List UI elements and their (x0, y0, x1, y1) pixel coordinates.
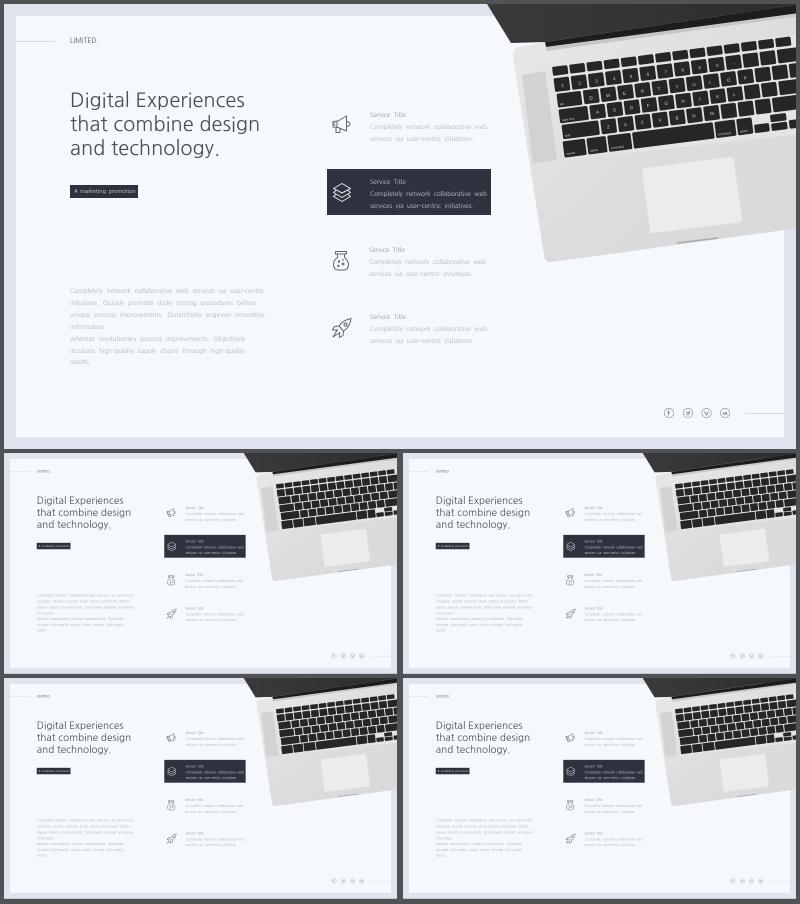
service 2: Completely network collaborative web (186, 771, 244, 774)
laptop photo: option (590, 148, 599, 153)
icon: flask (166, 800, 177, 811)
service 2: services via user-centric initiatives. (585, 777, 636, 780)
highlighted service box (563, 535, 645, 558)
social icons (730, 653, 764, 658)
brand label: LIMITED. (436, 470, 450, 473)
title (37, 721, 131, 754)
title (70, 90, 260, 158)
body text: initiatives. Quickly promote sticky testing procedures before (70, 300, 256, 306)
tag: # marketing promotion (438, 769, 468, 772)
service 3: Completely network collaborative web (185, 579, 243, 582)
service 3: Completely network collaborative web (369, 258, 486, 264)
service 3: services via user-centric initiatives. (185, 585, 236, 588)
service 4: services via user-centric initiatives. (186, 619, 237, 622)
body text: whereas revolutionary process improvements. Objectively (37, 618, 124, 621)
brand label: LIMITED. (70, 38, 99, 45)
body text: initiatives. Quickly promote sticky testing procedures before (37, 600, 129, 603)
service 3: services via user-centric initiatives. (185, 810, 236, 813)
service 2: services via user-centric initiatives. (186, 777, 237, 780)
body text: Completely network collaborative web services via user-centric (37, 594, 133, 597)
title: and technology. (436, 519, 510, 529)
service 4: services via user-centric initiatives. (585, 844, 636, 847)
laptop photo: ASDFGHJKL (596, 92, 736, 115)
tag: # marketing promotion (74, 188, 136, 194)
body text: information (436, 837, 453, 840)
service 2 (584, 540, 643, 555)
tag: # marketing promotion (39, 769, 69, 772)
body text: unique process improvements. Distinctively engineer innovative (436, 606, 532, 609)
social icons (664, 408, 730, 418)
title: and technology. (37, 744, 111, 754)
body text: incubate high-quality supply chains through high-quality (37, 623, 123, 626)
service 1 (186, 506, 244, 522)
service 2 (186, 763, 244, 781)
service 3: Service Title (185, 798, 203, 801)
icon: megaphone (166, 508, 176, 517)
service 1: Completely network collaborative web (186, 738, 244, 741)
service 2 (585, 763, 643, 781)
service 4: Service Title (585, 832, 602, 835)
service 4: services via user-centric initiatives. (585, 619, 636, 622)
social icons (331, 653, 364, 658)
service 3 (584, 797, 642, 815)
title: Digital Experiences (37, 721, 123, 731)
service 1: services via user-centric initiatives. (585, 743, 636, 746)
icon: layers (333, 183, 351, 202)
service 2: Service Title (585, 540, 602, 543)
service 3 (369, 246, 486, 276)
body text: information (37, 837, 54, 840)
service 4: Completely network collaborative web (585, 838, 643, 841)
highlighted service box (164, 535, 246, 558)
highlighted service box (164, 760, 246, 783)
body text: information (37, 612, 54, 615)
body text (436, 594, 532, 632)
icon: flask (565, 800, 576, 811)
service 3: Service Title (185, 573, 203, 576)
body text: initiatives. Quickly promote sticky testing procedures before (436, 825, 528, 828)
service 3: Completely network collaborative web (185, 804, 243, 807)
icon: megaphone (566, 508, 575, 517)
service 2: services via user-centric initiatives. (186, 552, 237, 555)
laptop photo (244, 678, 397, 806)
title: that combine design (37, 508, 131, 518)
laptop photo: 1234567890- (561, 61, 735, 88)
service 4 (584, 606, 643, 622)
service 4 (186, 606, 244, 622)
brand label: LIMITED. (37, 470, 51, 473)
service 1: Completely network collaborative web (585, 738, 643, 741)
body text: whereas revolutionary process improvements. Objectively (436, 843, 523, 846)
body text: Completely network collaborative web services via user-centric (436, 594, 532, 597)
body text (436, 818, 532, 859)
service 1 (585, 730, 643, 748)
service 4: Service Title (186, 607, 203, 610)
body text: whereas revolutionary process improvements. Objectively (37, 843, 124, 846)
body text: results. (37, 854, 47, 857)
service 1: Service Title (370, 112, 406, 118)
body text: incubate high-quality supply chains through high-quality (436, 623, 522, 626)
icon: flask (167, 576, 176, 586)
body text: Completely network collaborative web services via user-centric (70, 288, 264, 294)
service 3 (185, 797, 243, 815)
service 3: Completely network collaborative web (584, 579, 642, 582)
body text: results. (70, 359, 91, 365)
service 4: Completely network collaborative web (370, 326, 487, 332)
service 2: Service Title (186, 765, 203, 768)
service 2: Service Title (186, 540, 203, 543)
brand label: LIMITED. (436, 695, 450, 698)
service 2: Service Title (370, 179, 406, 185)
service 1: Service Title (585, 507, 602, 510)
service 3: Service Title (369, 246, 405, 252)
service 2: Completely network collaborative web (585, 546, 643, 549)
service 4: Service Title (585, 607, 602, 610)
title: and technology. (37, 519, 111, 529)
title: Digital Experiences (436, 496, 522, 506)
service 1: services via user-centric initiatives. (370, 136, 473, 142)
service 4: Service Title (186, 832, 203, 835)
social icons (4, 678, 397, 899)
tag (37, 768, 70, 774)
service 1: Completely network collaborative web (370, 124, 487, 130)
icon: flask (333, 251, 349, 270)
service 2: Completely network collaborative web (186, 546, 244, 549)
title: and technology. (70, 138, 220, 158)
tag (436, 768, 469, 774)
body text: whereas revolutionary process improvements. Objectively (70, 336, 245, 342)
title: Digital Experiences (37, 496, 123, 506)
service 4: Completely network collaborative web (186, 838, 244, 841)
body text: incubate high-quality supply chains through high-quality (37, 848, 123, 851)
panel: main slide (4, 4, 796, 449)
title (436, 496, 530, 530)
laptop photo: ZXCVBNM (607, 111, 715, 129)
service 3 (584, 573, 642, 588)
title: that combine design (436, 508, 530, 518)
service 3: services via user-centric initiatives. (584, 585, 635, 588)
highlighted service box (563, 760, 645, 783)
service 1: Service Title (585, 732, 602, 735)
service 2: services via user-centric initiatives. (585, 552, 636, 555)
body text: incubate high-quality supply chains through high-quality (70, 348, 245, 354)
service 4: services via user-centric initiatives. (186, 844, 237, 847)
tag: # marketing promotion (438, 544, 468, 547)
service 4 (370, 314, 487, 344)
service 2: services via user-centric initiatives. (370, 203, 473, 209)
service 4 (186, 830, 244, 848)
service 1: services via user-centric initiatives. (585, 518, 636, 521)
service 3: Service Title (584, 573, 602, 576)
body text (36, 818, 134, 857)
service 4: Completely network collaborative web (186, 613, 244, 616)
service 1 (186, 730, 244, 748)
body text: Completely network collaborative web services via user-centric (436, 819, 532, 822)
laptop photo: caps lock (562, 117, 575, 122)
panel: small slide bottom right (403, 678, 796, 899)
service 1: Completely network collaborative web (585, 513, 643, 516)
service 4: Service Title (370, 314, 406, 320)
icon: megaphone (332, 116, 350, 133)
service 2 (370, 179, 487, 209)
laptop photo: QWERTYUIOP (589, 75, 747, 100)
body text: unique process improvements. Distinctively engineer innovative (37, 606, 133, 609)
service 3: Completely network collaborative web (584, 804, 642, 807)
service 2: Service Title (585, 765, 602, 768)
body text: unique process improvements. Distinctively engineer innovative (70, 312, 265, 318)
title: and technology. (436, 744, 510, 754)
laptop photo: shift (565, 133, 571, 138)
icon: megaphone (166, 733, 176, 742)
service 1: Completely network collaborative web (186, 513, 244, 516)
service 3: Service Title (584, 798, 602, 801)
service 4: services via user-centric initiatives. (370, 338, 473, 344)
service 3: services via user-centric initiatives. (369, 270, 472, 276)
tag: # marketing promotion (39, 544, 69, 547)
icon: rocket (566, 608, 576, 619)
icon: layers (565, 766, 576, 777)
icon: rocket (332, 318, 352, 338)
service 4: Completely network collaborative web (585, 613, 643, 616)
icon: megaphone (565, 733, 576, 743)
service 2: Completely network collaborative web (585, 771, 643, 774)
service 2: Completely network collaborative web (370, 191, 487, 197)
title: that combine design (37, 733, 131, 743)
body text: initiatives. Quickly promote sticky testing procedures before (436, 600, 528, 603)
tag (37, 543, 70, 549)
title: that combine design (436, 733, 530, 743)
panel: small slide top right (403, 453, 796, 674)
laptop photo (403, 678, 796, 899)
brand label: LIMITED. (37, 695, 51, 698)
title: that combine design (70, 114, 260, 134)
laptop photo (244, 453, 397, 581)
icon: layers (566, 542, 575, 552)
body text (36, 594, 134, 632)
icon: rocket (565, 833, 576, 844)
tag (70, 185, 138, 198)
body text: information (436, 612, 453, 615)
service 1: Service Title (186, 507, 203, 510)
body text (70, 288, 265, 365)
title: Digital Experiences (436, 721, 522, 731)
body text: Completely network collaborative web services via user-centric (37, 819, 133, 822)
service 4 (585, 830, 643, 848)
icon: rocket (166, 608, 176, 619)
body text: results. (436, 854, 446, 857)
panel: small slide top left (4, 453, 397, 674)
laptop photo: option (739, 129, 748, 134)
body text: incubate high-quality supply chains through high-quality (436, 848, 522, 851)
service 1 (584, 506, 643, 522)
service 3: services via user-centric initiatives. (584, 810, 635, 813)
icon: layers (166, 766, 177, 777)
body text: results. (37, 629, 47, 632)
laptop photo (487, 4, 796, 262)
icon: rocket (166, 833, 177, 844)
icon: layers (168, 542, 176, 552)
laptop photo: tab (560, 102, 565, 106)
laptop photo (642, 453, 796, 581)
body text: initiatives. Quickly promote sticky testing procedures before (37, 825, 129, 828)
body text: whereas revolutionary process improvements. Objectively (436, 618, 523, 621)
service 1 (370, 112, 487, 142)
title: Digital Experiences (70, 90, 245, 110)
service 3 (185, 573, 243, 588)
title (37, 496, 131, 530)
tag (436, 543, 469, 549)
body text: results. (436, 629, 446, 632)
body text: information (70, 324, 104, 330)
title (436, 720, 530, 755)
panel: small slide bottom left (4, 678, 397, 899)
service 1: services via user-centric initiatives. (186, 518, 237, 521)
laptop photo: command (718, 131, 732, 136)
body text: unique process improvements. Distinctively engineer innovative (436, 831, 532, 834)
service 1: services via user-centric initiatives. (186, 743, 237, 746)
highlighted service box (327, 169, 491, 215)
laptop photo: command (611, 144, 624, 150)
service 1: Service Title (186, 732, 203, 735)
body text: unique process improvements. Distinctively engineer innovative (37, 831, 133, 834)
service 2 (186, 540, 244, 555)
icon: flask (566, 576, 574, 586)
laptop photo: control (566, 151, 576, 156)
social icons (403, 678, 796, 899)
